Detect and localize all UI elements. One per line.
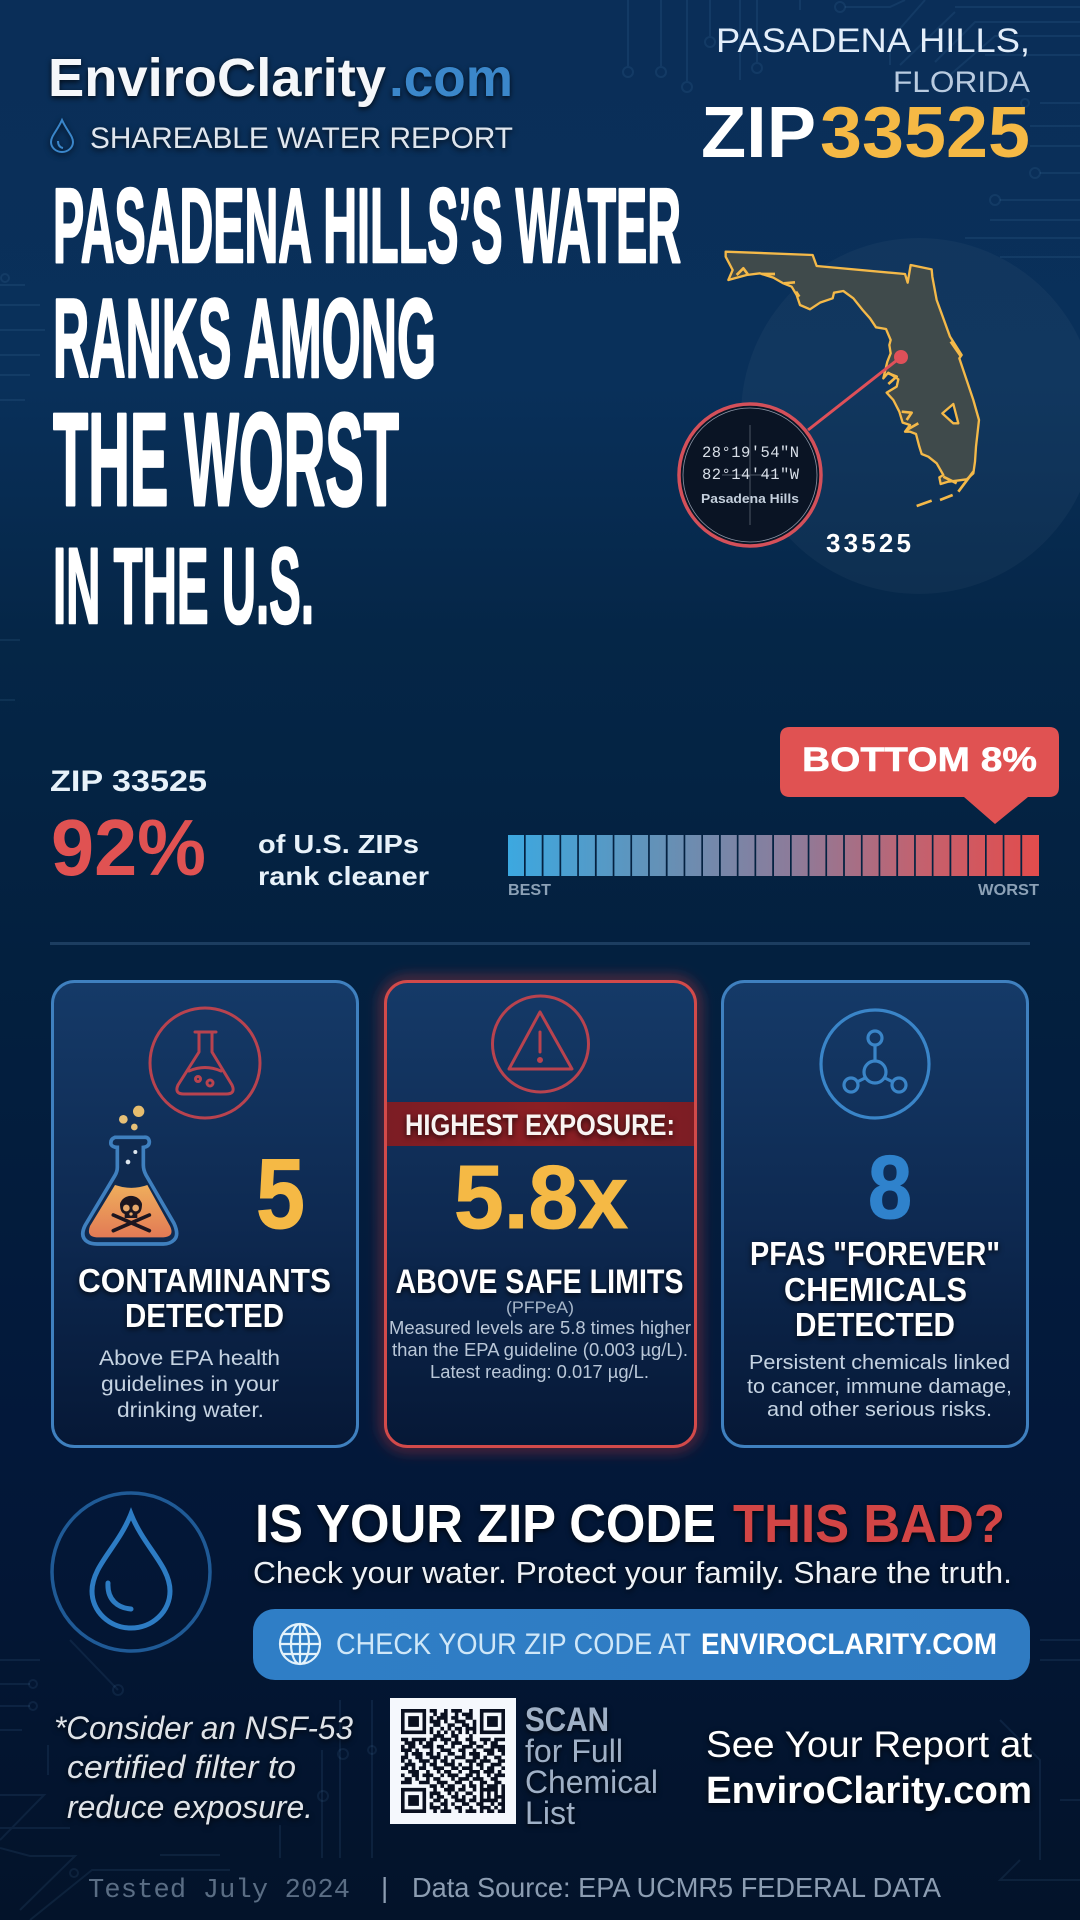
stat: 8: 8 [868,1138,912,1238]
card body text: than the EPA guideline (0.003 µg/L). [392,1340,688,1360]
filter note: certified filter to [67,1749,296,1785]
icon: small water drop [51,120,73,152]
call to action heading: THIS BAD? [733,1494,1005,1554]
card body text: Persistent chemicals linked [749,1351,1010,1374]
card body text: guidelines in your [101,1373,279,1396]
card body text [99,1347,280,1422]
card heading: CONTAMINANTS [78,1262,331,1299]
button: check zip code: ENVIROCLARITY.COM [701,1628,997,1661]
city: PASADENA HILLS, [716,22,1030,60]
card heading: CHEMICALS [784,1271,967,1308]
coordinates badge [679,404,821,546]
segmented gauge [508,835,1039,876]
map backdrop circle [741,238,1080,594]
icon: water drop emblem [52,1493,210,1651]
headline: RANKS AMONG [53,276,436,401]
card body text: drinking water. [117,1399,264,1422]
call to action heading [255,1494,1005,1554]
icon: poison flask [83,1106,177,1244]
report link: EnviroClarity.com [706,1770,1032,1812]
card body text: Latest reading: 0.017 µg/L. [430,1362,649,1382]
card heading: ABOVE SAFE LIMITS [396,1263,684,1301]
logo wordmark: EnviroClarity [48,48,386,108]
scan label: Chemical [525,1764,658,1800]
logo [48,48,513,155]
stat: 5: 5 [256,1138,305,1249]
card heading [750,1235,1000,1343]
ranking stat [50,765,429,892]
report link [706,1724,1033,1812]
location block [701,22,1030,173]
card body text: to cancer, immune damage, [747,1375,1012,1398]
panel: contaminants detected [52,982,358,1446]
zip code: ZIP [701,93,816,173]
card heading: PFAS "FOREVER" [750,1235,1000,1272]
gauge labels: WORST [978,882,1039,899]
scan label: List [525,1795,575,1831]
coordinates badge: Pasadena Hills [701,491,799,506]
zip label: ZIP 33525 [50,765,207,798]
rank caption: rank cleaner [258,861,429,891]
callout: bottom 8% [780,727,1059,824]
button: check zip code [253,1609,1030,1680]
card body text: Measured levels are 5.8 times higher [389,1318,691,1338]
panel: highest exposure [386,982,696,1446]
connector line [808,357,901,430]
coordinates badge: 82°14′41″W [702,466,800,484]
footer: Data Source: EPA UCMR5 FEDERAL DATA [412,1872,941,1903]
highlight band: HIGHEST EXPOSURE: [405,1109,675,1142]
footer [88,1872,941,1906]
zip code [701,93,1030,173]
icon: molecule [821,1010,929,1118]
map zip label: 33525 [826,528,911,558]
headline: IN THE U.S. [53,525,314,646]
logo wordmark: .com [389,48,513,108]
scan label: for Full [525,1733,623,1769]
percentage: 92% [51,803,206,892]
scan label: SCAN [525,1701,609,1739]
rank caption [258,829,429,891]
button label: CHECK YOUR ZIP CODE AT [336,1628,691,1661]
callout: bottom 8%: BOTTOM 8% [802,741,1037,779]
footer: | [381,1872,388,1903]
filter note [54,1710,353,1825]
state: FLORIDA [893,66,1030,99]
map: florida outline [726,252,979,506]
card body text [747,1351,1012,1421]
scan label [525,1701,658,1831]
panel: pfas chemicals [722,982,1028,1446]
zip code: 33525 [820,93,1030,173]
call to action tagline: Check your water. Protect your family. Share the truth. [253,1555,1012,1590]
icon: warning triangle [492,996,588,1092]
report subtitle: SHAREABLE WATER REPORT [90,122,513,155]
gauge labels: BEST [508,882,551,899]
contaminant name: (PFPeA) [506,1298,574,1317]
qr code [390,1698,516,1824]
headline [53,167,681,646]
card body text: Above EPA health [99,1347,280,1370]
footer: Tested July 2024 [88,1876,350,1906]
card heading: DETECTED [795,1306,955,1343]
headline: THE WORST [53,386,399,533]
stat: 5.8x: 5.8x [454,1148,628,1248]
card body text [389,1318,691,1382]
filter note: *Consider an NSF-53 [54,1710,353,1746]
card body text: and other serious risks. [767,1398,992,1421]
call to action heading: IS YOUR ZIP CODE [255,1494,716,1554]
card heading: DETECTED [125,1297,284,1334]
florida locator map [679,238,1080,594]
coordinates badge: 28°19′54″N [702,444,799,462]
card heading [78,1262,331,1334]
gauge labels [508,882,1039,899]
icon: flask in circle [150,1008,260,1118]
report link: See Your Report at [706,1724,1033,1765]
ranking bar [508,727,1059,899]
highlight band [387,1102,694,1146]
filter note: reduce exposure. [67,1789,313,1825]
icon: globe [280,1624,320,1664]
location pin [894,350,908,364]
rank caption: of U.S. ZIPs [258,829,419,859]
